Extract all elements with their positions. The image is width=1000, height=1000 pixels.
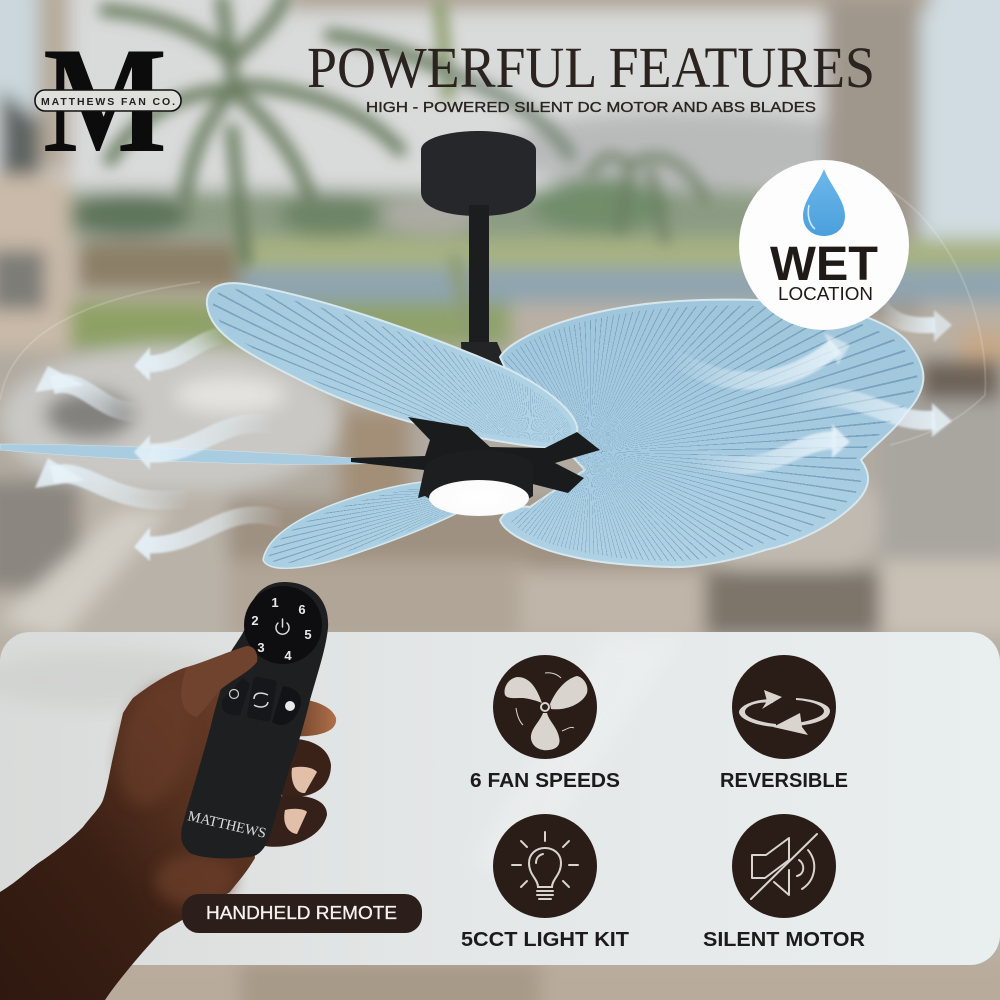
arrow: left 4: [35, 458, 190, 500]
fan blade brackets: [351, 417, 600, 493]
remote number keys: 2: [251, 613, 259, 628]
feature: reversible: REVERSIBLE: [720, 770, 848, 792]
badge: wet location: WET: [770, 238, 878, 291]
airflow arrows: [35, 306, 952, 561]
remote brand text: MATTHEWS: [186, 808, 268, 842]
remote number keys: 6: [298, 602, 306, 617]
feature: silent motor: [703, 814, 866, 951]
blade: small lower left: [262, 481, 457, 569]
icon: reversible arrows: [732, 655, 836, 759]
hand fingers: [265, 699, 336, 847]
blade: upper left: [206, 282, 578, 448]
arrow: left 3: [134, 423, 275, 470]
fan motor housing: [418, 450, 533, 508]
arrow: right 2: [785, 397, 952, 437]
logo: Matthews Fan Co.: M: [43, 16, 167, 184]
logo: Matthews Fan Co.: MATTHEWS FAN CO.: [41, 96, 175, 108]
remote function buttons: [222, 676, 301, 725]
arrow: left 2: [35, 366, 140, 412]
remote number keys: 3: [257, 640, 265, 655]
remote number keys: [251, 595, 312, 663]
panel: frosted features panel: [0, 632, 1000, 965]
icon: fan: [493, 655, 597, 759]
badge: wet location: [739, 160, 909, 330]
blade: large right pair: [498, 298, 924, 568]
arrow: left 5: [134, 515, 285, 561]
arrow: right 1: [670, 333, 850, 381]
hand thumb: [181, 646, 257, 717]
ceiling fan: [0, 131, 924, 569]
badge: wet location: LOCATION: [778, 284, 873, 304]
remote number keys: 4: [284, 648, 292, 663]
fan canopy: [421, 131, 536, 216]
fan downrod: [461, 205, 510, 372]
fan light kit: [429, 480, 529, 516]
subtitle: HIGH - POWERED SILENT DC MOTOR AND ABS BLADES: [366, 99, 816, 116]
remote power icon: [276, 619, 289, 634]
icon: light bulb: [493, 814, 597, 918]
icon: water drop: [803, 169, 845, 236]
title: POWERFUL FEATURES: [307, 35, 875, 100]
arrow: right 4: [880, 306, 952, 342]
label: handheld remote: [182, 894, 422, 933]
feature: 5CCT light kit: [461, 814, 629, 951]
icon: muted speaker: [732, 814, 836, 918]
feature: 6 fan speeds: 6 FAN SPEEDS: [470, 770, 620, 792]
label: handheld remote: HANDHELD REMOTE: [206, 903, 397, 923]
hand holding remote: [0, 582, 336, 1000]
blade: thin left blade: [0, 444, 410, 464]
arrow: right 3: [690, 424, 850, 465]
feature: reversible: [720, 655, 848, 792]
remote dial: [244, 586, 322, 664]
feature: silent motor: SILENT MOTOR: [703, 929, 866, 951]
remote number keys: 1: [271, 595, 279, 610]
hand palm and arm: [0, 667, 255, 1000]
feature: 6 fan speeds: [470, 655, 620, 792]
arrow: left 1: [134, 335, 228, 381]
feature: 5CCT light kit: 5CCT LIGHT KIT: [461, 929, 629, 951]
remote control: [181, 582, 328, 858]
faint air swirl arcs: [0, 185, 985, 445]
remote number keys: 5: [304, 627, 312, 642]
